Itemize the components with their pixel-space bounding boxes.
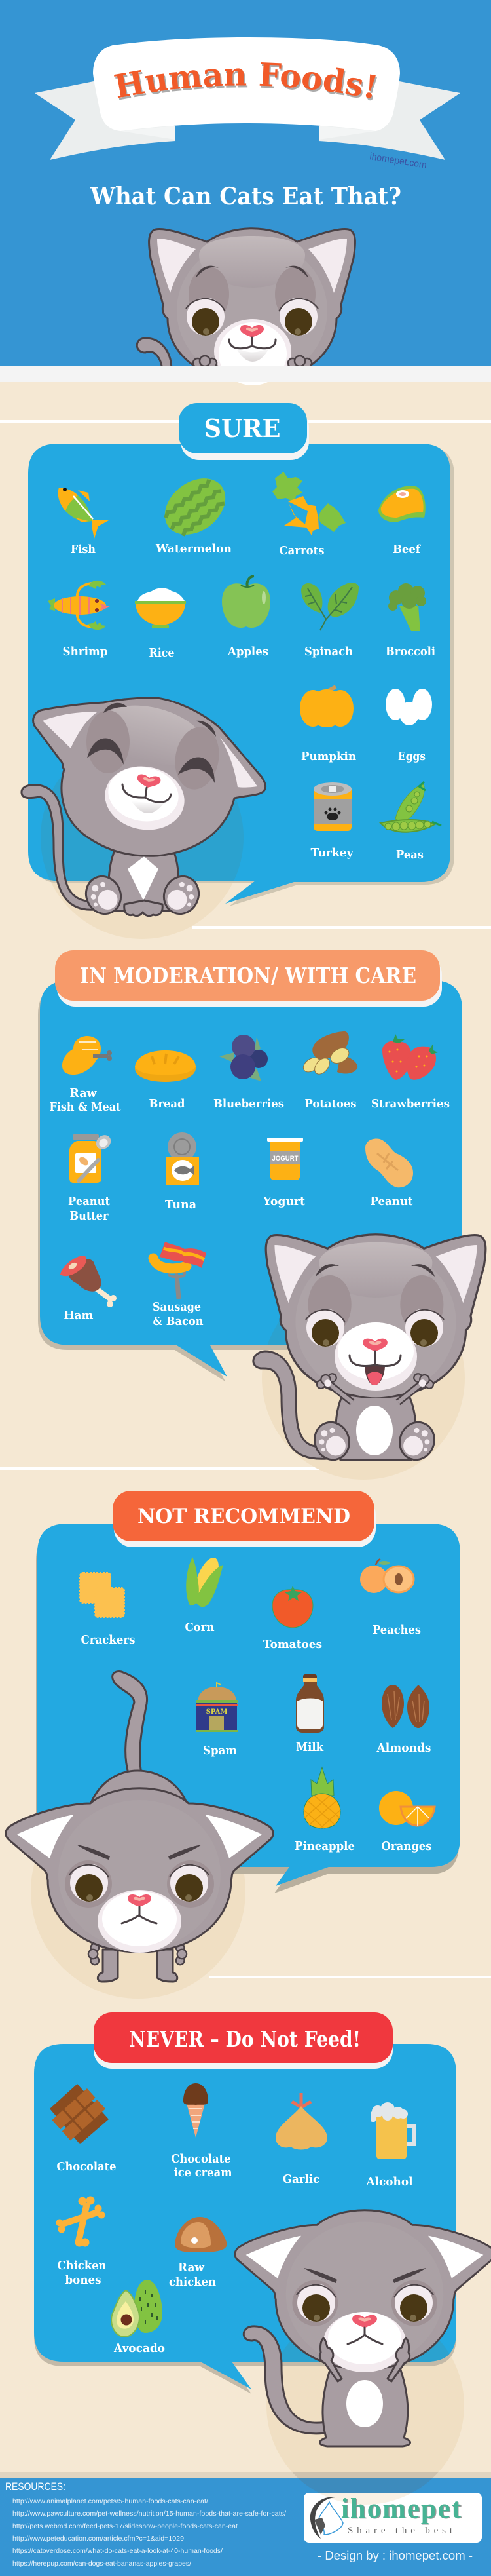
- food: spinach: Spinach: [304, 645, 353, 659]
- food: peanut butter: Butter: [69, 1209, 109, 1223]
- resources list: http://pets.webmd.com/feed-pets-17/slideshow-people-foods-cats-can-eat: [12, 2523, 238, 2530]
- food: crackers: [80, 1573, 135, 1647]
- food: spinach: [301, 583, 359, 659]
- food: chicken bones: [56, 2197, 106, 2287]
- food: blueberries: Blueberries: [213, 1097, 284, 1111]
- food: raw fish and meat: Raw: [69, 1086, 97, 1100]
- food: yogurt: [263, 1138, 306, 1208]
- heading pill: [55, 950, 442, 1007]
- food: spam: [196, 1683, 238, 1758]
- circle tint on panel: [41, 776, 244, 881]
- resources list: https://herepup.com/can-dogs-eat-bananas-apples-grapes/: [12, 2560, 191, 2567]
- food: chocolate ice cream: Chocolate: [172, 2152, 230, 2166]
- heading pill: IN MODERATION/ WITH CARE: [80, 963, 416, 988]
- speech bubble panel: [34, 2044, 456, 2389]
- food: chocolate: [50, 2084, 117, 2174]
- food: strawberries: [371, 1034, 450, 1111]
- food: corn: Corn: [185, 1621, 215, 1634]
- food: carrots: Carrots: [279, 544, 325, 558]
- cat: middle-finger angry standing: [235, 2210, 491, 2446]
- food: raw chicken: [169, 2217, 227, 2289]
- heading pill: [94, 2012, 393, 2069]
- cat: happy sitting: [22, 695, 266, 919]
- subtitle: What Can Cats Eat That?: [90, 183, 401, 210]
- food: sausage and bacon: Sausage: [153, 1300, 201, 1314]
- food: fish: [58, 488, 109, 556]
- food: peanut butter: [68, 1132, 114, 1223]
- food: ham: [60, 1256, 117, 1322]
- food: peanut butter: Peanut: [68, 1195, 111, 1208]
- food: yogurt: Yogurt: [263, 1195, 306, 1208]
- food: milk: Milk: [296, 1740, 323, 1754]
- food: bread: Bread: [149, 1097, 185, 1111]
- backdrop circle: [266, 2307, 464, 2505]
- circle tint on panel: [282, 2341, 449, 2362]
- food: potatoes: [300, 1031, 357, 1111]
- logo: ihomepet: Share the best: [348, 2526, 453, 2536]
- food: peanut: [365, 1139, 413, 1208]
- food: rice: [135, 588, 186, 660]
- food: tomato: [263, 1586, 322, 1651]
- food: crackers: Crackers: [81, 1633, 135, 1647]
- resources list: http://www.peteducation.com/article.cfm?c=1&aid=1029: [12, 2535, 184, 2543]
- food: sausage and bacon: [153, 1242, 206, 1328]
- food: avocado: Avocado: [113, 2341, 165, 2355]
- food: yogurt: JOGURT: [272, 1155, 299, 1163]
- panel shadow: [36, 1531, 459, 1893]
- panel shadow: [32, 446, 454, 906]
- food: peaches: [360, 1559, 421, 1637]
- food: rice: Rice: [149, 646, 174, 660]
- resources list: http://www.animalplanet.com/pets/5-human-foods-cats-can-eat/: [12, 2498, 208, 2505]
- food: peas: Peas: [396, 848, 424, 862]
- food: shrimp: [48, 581, 110, 659]
- food: watermelon: Watermelon: [155, 542, 232, 556]
- backdrop circle: [41, 736, 244, 939]
- section divider lines: [0, 420, 491, 1978]
- food: tuna: Tuna: [165, 1198, 196, 1212]
- heading pill: [179, 403, 309, 460]
- heading pill: [113, 1491, 376, 1547]
- section: NOT RECOMMEND: [6, 1491, 460, 1999]
- speech bubble panel: [40, 980, 462, 1377]
- footer strip: [0, 2472, 491, 2478]
- title: Human Foods!: [114, 62, 376, 98]
- speech bubble panel: [37, 1524, 460, 1886]
- resources heading: RESOURCES:: [5, 2480, 65, 2493]
- food: eggs: [386, 689, 432, 763]
- food: chocolate: Chocolate: [56, 2160, 117, 2174]
- resources list: http://www.pawculture.com/pet-wellness/nutrition/15-human-foods-that-are-safe-for-cats/: [12, 2510, 286, 2518]
- food: ham: Ham: [64, 1309, 93, 1322]
- food: potatoes: Potatoes: [305, 1097, 356, 1111]
- food: almonds: [376, 1685, 431, 1755]
- food: pumpkin: Pumpkin: [301, 750, 356, 763]
- logo: ihomepet: ihomepet: [342, 2494, 462, 2525]
- cat: peeking header cat: [137, 229, 355, 385]
- food: turkey can: [310, 782, 354, 860]
- food: beef: [378, 486, 426, 556]
- title: Human Foods!: [115, 64, 377, 101]
- panel shadow: [38, 985, 460, 1381]
- food: tuna: [165, 1132, 199, 1212]
- food: blueberries: [213, 1035, 284, 1111]
- heading pill: NEVER – Do Not Feed!: [129, 2026, 361, 2052]
- food: carrots: [272, 472, 346, 558]
- food: oranges: Oranges: [381, 1839, 432, 1853]
- header band: [0, 0, 491, 366]
- food: tomato: Tomatoes: [263, 1638, 322, 1651]
- backdrop circle: [262, 1277, 465, 1480]
- food: spam: SPAM: [206, 1708, 227, 1716]
- resources list: [12, 2498, 286, 2567]
- ribbon banner: [35, 37, 460, 171]
- food: milk: [296, 1674, 324, 1754]
- backdrop circle: [31, 1784, 245, 1999]
- food: turkey can: Turkey: [310, 846, 354, 860]
- food: peas: [380, 782, 441, 862]
- food: eggs: Eggs: [398, 750, 426, 763]
- food: beer: [366, 2102, 414, 2189]
- food: raw chicken: Raw: [178, 2261, 204, 2275]
- food: apple: [222, 576, 270, 659]
- food: apple: Apples: [227, 645, 268, 659]
- food: garlic: Garlic: [283, 2172, 319, 2186]
- food: watermelon: [154, 467, 236, 556]
- food: broccoli: [386, 583, 435, 659]
- food: sausage and bacon: & Bacon: [153, 1315, 203, 1328]
- section: IN MODERATION: [38, 950, 486, 1480]
- food: chicken bones: Chicken: [58, 2259, 106, 2273]
- heading pill: NOT RECOMMEND: [137, 1505, 350, 1528]
- food: raw chicken: chicken: [169, 2275, 216, 2289]
- panel shadow: [34, 2048, 456, 2394]
- food: beef: Beef: [393, 543, 421, 556]
- heading pill: SURE: [204, 413, 280, 443]
- circle tint on panel: [267, 1321, 287, 1345]
- food: beer: Alcohol: [366, 2175, 413, 2189]
- food: shrimp: Shrimp: [63, 645, 107, 659]
- speech bubble panel: [28, 444, 450, 904]
- section: NEVER: [34, 2012, 464, 2505]
- food: bread: [135, 1050, 196, 1111]
- food: strawberries: Strawberries: [371, 1097, 450, 1111]
- food: peaches: Peaches: [373, 1623, 421, 1637]
- food: almonds: Almonds: [376, 1741, 431, 1755]
- food: fish: Fish: [71, 543, 96, 556]
- cat: back arched, grumpy: [6, 1672, 273, 1982]
- design credit: - Design by : ihomepet.com -: [318, 2549, 473, 2562]
- circle overlap on footer: [293, 2472, 438, 2493]
- food: chocolate ice cream: ice cream: [174, 2166, 232, 2180]
- cat: cheering sitting: [253, 1235, 486, 1465]
- food: chocolate ice cream: [172, 2083, 232, 2180]
- section: SURE: [22, 403, 454, 939]
- food: raw fish and meat: Fish & Meat: [50, 1100, 121, 1114]
- logo: ihomepet: [304, 2493, 482, 2543]
- food: raw fish and meat: [50, 1036, 121, 1114]
- food: oranges: [379, 1791, 435, 1853]
- food: spam: Spam: [203, 1744, 237, 1758]
- food: pumpkin: [300, 687, 356, 763]
- food: peanut: Peanut: [371, 1195, 413, 1208]
- footer band: [0, 2478, 491, 2576]
- logo: ihomepet: ihomepet: [341, 2493, 462, 2524]
- food: pineapple: [295, 1767, 355, 1853]
- white strip: [0, 366, 491, 382]
- food: chicken bones: bones: [65, 2273, 101, 2287]
- food: garlic: [276, 2093, 327, 2186]
- food: avocado: [111, 2280, 165, 2355]
- food: pineapple: Pineapple: [295, 1839, 355, 1853]
- watermark: ihomepet.com: [369, 151, 427, 171]
- food: corn: [185, 1554, 223, 1634]
- resources list: https://catoverdose.com/what-do-cats-eat-a-look-at-40-human-foods/: [12, 2548, 223, 2555]
- food: broccoli: Broccoli: [386, 645, 435, 659]
